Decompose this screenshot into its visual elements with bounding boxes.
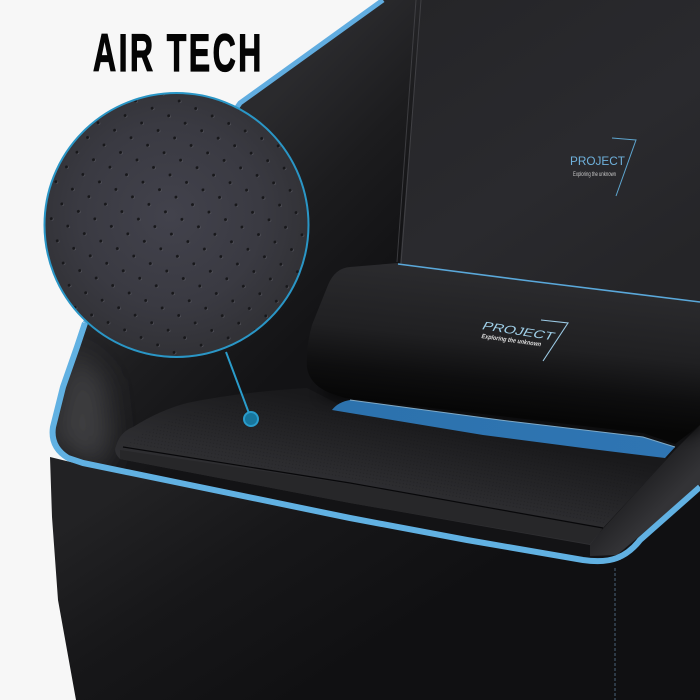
seat seam <box>123 447 603 528</box>
back logo <box>570 138 636 196</box>
inner left armrest highlight <box>50 350 112 470</box>
seat cushion <box>115 388 668 545</box>
right armrest <box>590 425 700 556</box>
chair upper wing <box>53 0 700 560</box>
chair lower body <box>50 457 700 700</box>
back logo seven <box>612 138 636 196</box>
body stitching <box>614 568 616 700</box>
pillow logo wordmark: PROJECT <box>480 319 558 343</box>
leather fill <box>44 93 308 357</box>
back panel stitching <box>397 0 421 264</box>
circle border <box>44 93 308 357</box>
pillow logo seven <box>541 320 568 361</box>
under pillow shadow <box>320 375 700 435</box>
seat front edge <box>120 450 603 544</box>
back panel blue piping <box>398 264 700 302</box>
back panel <box>400 0 700 302</box>
title: AIR TECH <box>93 24 264 83</box>
perforation dots <box>46 94 308 356</box>
back logo tagline: Exploring the unknown <box>573 171 616 178</box>
lumbar pillow <box>307 263 700 444</box>
callout leader line <box>226 352 250 416</box>
callout marker dot <box>244 412 258 426</box>
pillow logo tagline: Exploring the unknown <box>480 333 542 348</box>
chair front piping <box>53 323 700 561</box>
back logo wordmark: PROJECT <box>570 154 626 168</box>
seat perforation <box>125 400 650 524</box>
seat surface <box>115 388 668 545</box>
chair top piping <box>85 0 383 323</box>
blue strip top edge <box>350 400 675 447</box>
magnified leather circle <box>44 93 308 357</box>
blue strip under pillow <box>332 400 675 458</box>
pillow logo <box>480 319 568 361</box>
